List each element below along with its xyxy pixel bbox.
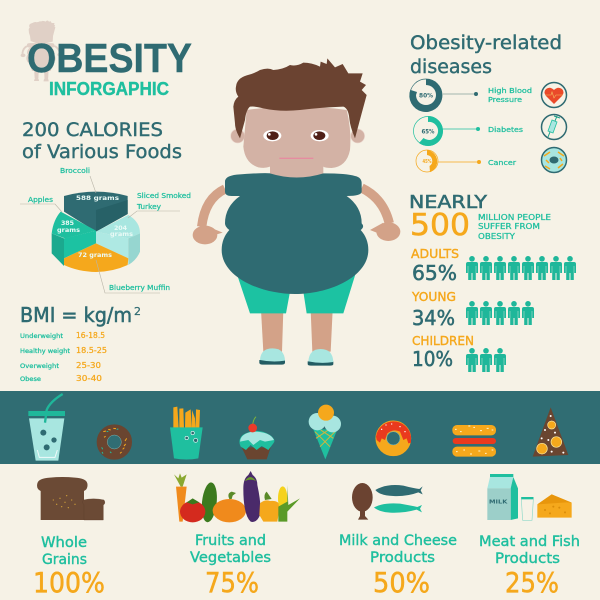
heading: 200 calories: of Various Foods — [22, 141, 182, 163]
pie chart: calories by food — [20, 167, 191, 293]
food group: meat and fish: Products — [495, 551, 560, 567]
pie labels: Apples — [28, 196, 53, 204]
food group: fruits and vegetables: 75% — [205, 566, 259, 599]
stat: young 34%: 34% — [412, 306, 455, 330]
pie labels: Broccoli — [60, 167, 90, 175]
stat: adults 65%: ADULTS — [411, 247, 459, 261]
title: OBESITY — [27, 35, 192, 81]
disease row: diabetes: Diabetes — [488, 125, 523, 134]
pie labels: Turkey — [136, 203, 161, 211]
heading: obesity-related diseases: diseases — [410, 57, 492, 78]
BMI table — [20, 331, 107, 383]
stat: children 10%: 10% — [412, 347, 453, 371]
BMI table: Overweight — [20, 363, 60, 370]
food group: fruits and vegetables: Vegetables — [190, 550, 271, 566]
face — [243, 107, 350, 177]
icon: cancer cell — [542, 148, 566, 172]
icon: frosted donut — [376, 421, 411, 451]
icon: syringe — [542, 114, 566, 140]
title — [27, 35, 192, 99]
pie chart: calories by food: grams — [110, 231, 133, 238]
arms — [193, 188, 400, 244]
pie chart: calories by food: 204 — [114, 225, 128, 232]
stat: children 10%: CHILDREN — [412, 334, 474, 348]
stat: nearly 500 million: SUFFER FROM — [478, 222, 540, 231]
food group: milk and cheese: Milk and Cheese — [339, 533, 457, 549]
BMI table: 18.5-25 — [76, 346, 107, 355]
eyes — [263, 130, 329, 141]
food group: whole grains: Grains — [42, 552, 87, 568]
mouth — [279, 156, 313, 160]
panel: junk food band — [0, 391, 600, 464]
food group: milk and cheese: Products — [370, 550, 435, 566]
heading: 200 calories — [22, 119, 182, 163]
BMI formula: 2 — [134, 305, 141, 318]
pie chart: calories by food: 72 grams — [78, 252, 112, 259]
hair — [233, 58, 367, 138]
stat: young 34% — [411, 290, 534, 330]
stat: nearly 500 million: 500 — [410, 208, 470, 243]
stat: children 10% — [412, 334, 506, 372]
icon: milk carton, glass, cheese: MILK — [489, 499, 508, 505]
subtitle: INFORGAPHIC — [49, 79, 169, 99]
food group: milk and cheese — [339, 483, 457, 599]
character: obese boy — [193, 58, 400, 366]
shirt — [222, 173, 368, 294]
BMI table: 16-18.5 — [76, 331, 105, 340]
BMI table: Obese — [20, 376, 41, 383]
pie labels: Sliced Smoked — [137, 192, 191, 200]
food group: meat and fish: 25% — [505, 566, 559, 599]
pie chart: calories by food: grams — [57, 227, 80, 234]
heading: obesity-related diseases — [410, 33, 562, 78]
pie chart: calories by food: 385 — [61, 220, 74, 227]
icon: drumstick and fish — [352, 483, 423, 520]
pie labels: Blueberry Muffin — [109, 284, 170, 292]
pie labels — [28, 167, 191, 292]
icon: french fries — [170, 407, 203, 459]
disease row: cancer: Cancer — [488, 158, 516, 167]
disease row: high blood pressure: High Blood — [488, 86, 532, 95]
legs — [261, 310, 333, 352]
food group: whole grains: Whole — [41, 535, 87, 551]
BMI table: Underweight — [20, 333, 64, 340]
food group: meat and fish: Meat and Fish — [479, 534, 580, 550]
icon: soda cup — [28, 394, 65, 461]
stat: nearly 500 million: MILLION PEOPLE — [478, 213, 551, 222]
shoes — [259, 348, 333, 366]
icon: faded character silhouette — [21, 20, 62, 81]
disease row: high blood pressure — [409, 79, 566, 112]
BMI table: 30-40 — [76, 374, 102, 383]
food group: whole grains — [33, 477, 105, 599]
disease row: diabetes — [414, 114, 566, 146]
stat: nearly 500 million: NEARLY — [409, 192, 488, 213]
disease row: high blood pressure: 80% — [419, 92, 433, 100]
icon: bread — [37, 477, 105, 520]
icon: pizza slice — [533, 407, 568, 457]
icon: heart — [542, 82, 566, 108]
shorts — [237, 273, 356, 313]
ears — [231, 129, 365, 143]
stat: nearly 500 million — [409, 192, 551, 243]
icon: vegetables — [174, 471, 300, 523]
BMI table: Healthy weight — [20, 348, 71, 355]
food group: whole grains: 100% — [33, 566, 105, 599]
food group: milk and cheese: 50% — [373, 566, 430, 599]
stat: young 34%: YOUNG — [411, 290, 456, 304]
BMI formula: BMI = kg/m — [20, 303, 132, 327]
disease row: diabetes: 65% — [422, 128, 434, 136]
disease row: cancer — [416, 148, 566, 172]
pie chart: calories by food: 588 grams — [76, 195, 119, 202]
food group: fruits and vegetables: Fruits and — [195, 533, 266, 549]
icon: burger — [452, 425, 496, 457]
food group: meat and fish — [479, 474, 580, 599]
stat: adults 65% — [411, 247, 576, 285]
food group: fruits and vegetables — [174, 471, 300, 599]
icon: cupcake — [239, 417, 274, 459]
heading: 200 calories: 200 CALORIES — [22, 119, 163, 141]
stat: adults 65%: 65% — [412, 261, 457, 285]
icon: chocolate donut — [102, 428, 127, 454]
disease row: high blood pressure: Pressure — [488, 95, 523, 104]
disease row: cancer: 45% — [422, 159, 432, 165]
icon: ice cream cone — [309, 405, 341, 459]
BMI table: 25-30 — [76, 361, 101, 370]
stat: nearly 500 million: OBESITY — [478, 232, 515, 241]
heading: obesity-related diseases: Obesity-related — [410, 33, 562, 54]
